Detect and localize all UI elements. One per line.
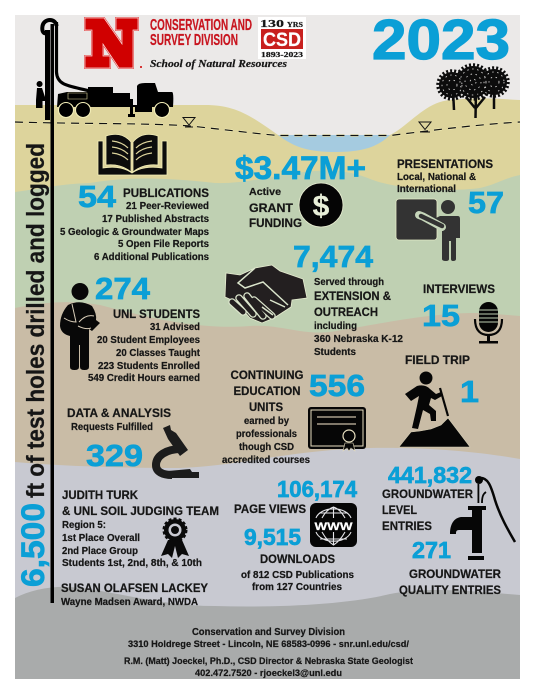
students list: 223 Students Enrolled xyxy=(98,361,200,372)
outreach text: EXTENSION & xyxy=(314,289,391,303)
Nebraska N logo xyxy=(85,18,142,68)
icon: award ribbon xyxy=(161,519,189,558)
page views label: PAGE VIEWS xyxy=(234,502,306,516)
downloads detail xyxy=(241,570,354,593)
award block: SUSAN OLAFSEN LACKEY xyxy=(61,581,208,595)
footer contact details xyxy=(124,627,414,679)
continuing education text xyxy=(222,368,310,466)
division name: CONSERVATION AND xyxy=(150,17,252,34)
CSD 130 years badge xyxy=(258,17,306,59)
award block xyxy=(61,581,208,608)
publications list: 5 Open File Reports xyxy=(118,239,209,250)
field trip block xyxy=(399,353,479,447)
level entries label: ENTRIES xyxy=(382,519,432,533)
level entries label: LEVEL xyxy=(382,503,417,517)
CSD 130 years badge: 1893-2023 xyxy=(261,51,304,59)
presentations block xyxy=(396,157,504,261)
outreach count: 7,474 xyxy=(293,239,374,274)
publications block xyxy=(60,134,209,263)
icon: open book xyxy=(98,134,167,175)
soil judging team block: JUDITH TURK xyxy=(62,488,138,502)
interviews block: INTERVIEWS xyxy=(423,282,495,296)
continuing education text: professionals xyxy=(236,429,297,440)
icon: drilling rig and truck xyxy=(36,20,173,603)
division name: SURVEY DIVISION xyxy=(150,32,238,49)
water table dashed line xyxy=(15,122,520,136)
icon: presenter at board xyxy=(396,199,460,261)
downloads count: 9,515 xyxy=(244,524,301,550)
students block xyxy=(60,271,201,384)
level entries label: GROUNDWATER xyxy=(382,487,473,501)
team results: 2nd Place Group xyxy=(62,546,138,557)
data and analysis block: DATA & ANALYSIS xyxy=(67,406,171,420)
publications count: 54 xyxy=(78,179,117,214)
publications list: 21 Peer-Reviewed xyxy=(126,201,209,212)
vertical drilling headline: ft of test holes drilled and logged xyxy=(22,143,50,498)
continuing education text: though CSD xyxy=(239,442,294,453)
downloads detail: of 812 CSD Publications xyxy=(241,570,354,581)
outreach text: OUTREACH xyxy=(314,305,378,319)
continuing education text: UNITS xyxy=(249,400,283,414)
team results: 1st Place Overall xyxy=(62,533,140,544)
icon: diploma xyxy=(308,407,366,451)
water table markers xyxy=(183,118,431,132)
year heading: 2023 xyxy=(372,8,510,72)
icon: hiker on mountain xyxy=(399,372,470,447)
truck xyxy=(57,83,173,107)
continuing education text: accredited courses xyxy=(222,455,310,466)
data and analysis block xyxy=(67,406,199,478)
presentations detail: Local, National & xyxy=(397,172,476,183)
division name xyxy=(150,17,252,49)
level entries count: 441,832 xyxy=(388,462,472,488)
publications list: 6 Additional Publications xyxy=(94,252,209,263)
icon: water pump xyxy=(450,476,515,560)
outreach text: Students xyxy=(314,347,356,358)
CSD 130 years badge: 130 xyxy=(260,19,284,30)
team results: Region 5: xyxy=(62,520,106,531)
requests count: 329 xyxy=(86,438,143,473)
web statistics block xyxy=(234,476,357,593)
students count: 274 xyxy=(95,271,151,306)
publications list: 17 Published Abstracts xyxy=(102,214,209,225)
page views count: 106,174 xyxy=(277,476,357,502)
footer contact details: 402.472.7520 - rjoeckel3@unl.edu xyxy=(195,668,342,679)
education count: 556 xyxy=(309,368,365,403)
presentations detail xyxy=(397,172,476,195)
icon: trees xyxy=(438,65,508,118)
students list: 20 Student Employees xyxy=(97,335,200,346)
presentations count: 57 xyxy=(468,185,504,220)
downloads detail: from 127 Countries xyxy=(252,582,342,593)
outreach text: Served through xyxy=(314,277,384,288)
CSD 130 years badge: YRS xyxy=(287,21,303,29)
downloads label: DOWNLOADS xyxy=(260,552,335,566)
footer contact details: R.M. (Matt) Joeckel, Ph.D., CSD Director & Nebraska State Geologist xyxy=(124,656,414,667)
icon: www globe: WWW xyxy=(314,521,353,533)
icon: dollar coin: $ xyxy=(313,190,330,223)
students list: 31 Advised xyxy=(150,322,200,333)
soil judging team block xyxy=(62,488,219,569)
funding amount: $3.47M+ xyxy=(235,150,366,186)
lake xyxy=(278,135,390,152)
field trip block: FIELD TRIP xyxy=(405,353,470,367)
award block: Wayne Madsen Award, NWDA xyxy=(61,597,198,608)
outreach block xyxy=(225,239,403,358)
groundwater block xyxy=(382,462,515,597)
presentations detail: International xyxy=(397,184,456,195)
field trip count: 1 xyxy=(460,374,479,409)
students list: UNL STUDENTS xyxy=(113,307,200,321)
funding label xyxy=(249,186,302,230)
quality entries count: 271 xyxy=(412,537,451,563)
icon: microphone xyxy=(475,302,502,344)
funding label: Active xyxy=(249,186,281,198)
continuing education text: earned by xyxy=(244,416,289,427)
soil judging team block: & UNL SOIL JUDGING TEAM xyxy=(62,504,219,518)
continuing education text: CONTINUING xyxy=(230,368,304,382)
funding label: FUNDING xyxy=(249,216,302,230)
quality entries label xyxy=(399,567,501,597)
quality entries label: QUALITY ENTRIES xyxy=(399,583,501,597)
publications list xyxy=(60,186,209,263)
CSD 130 years badge: CSD xyxy=(263,30,301,51)
footer contact details: 3310 Holdrege Street - Lincoln, NE 68583-0996 - snr.unl.edu/csd/ xyxy=(128,639,409,650)
requests label: Requests Fulfilled xyxy=(71,422,153,433)
icon: student with backpack xyxy=(60,283,100,370)
team results xyxy=(62,520,202,569)
vertical drilling headline xyxy=(15,143,51,587)
driller figure xyxy=(36,81,45,108)
drill stem xyxy=(50,24,54,603)
publications list: PUBLICATIONS xyxy=(123,186,209,200)
presentations block: PRESENTATIONS xyxy=(397,157,493,171)
interviews count: 15 xyxy=(422,298,460,333)
continuing education block xyxy=(222,368,366,466)
level entries label xyxy=(382,487,473,533)
outreach text: 360 Nebraska K-12 xyxy=(314,334,403,345)
school name: School of Natural Resources xyxy=(150,58,287,70)
vertical drilling headline: 6,500 xyxy=(15,503,51,587)
interviews block xyxy=(422,282,502,344)
students list: 549 Credit Hours earned xyxy=(88,373,200,384)
publications list: 5 Geologic & Groundwater Maps xyxy=(60,227,209,238)
footer contact details: Conservation and Survey Division xyxy=(192,627,345,638)
icon: handshake xyxy=(225,265,307,323)
outreach text: including xyxy=(314,321,357,332)
funding label: GRANT xyxy=(249,201,294,215)
students list: 20 Classes Taught xyxy=(116,348,201,359)
students list xyxy=(88,307,201,384)
grant funding block xyxy=(235,150,366,230)
outreach text xyxy=(314,277,403,358)
icon: microscope xyxy=(156,425,199,478)
quality entries label: GROUNDWATER xyxy=(409,567,501,581)
continuing education text: EDUCATION xyxy=(234,384,300,398)
team results: Students 1st, 2nd, 8th, & 10th xyxy=(62,558,202,569)
